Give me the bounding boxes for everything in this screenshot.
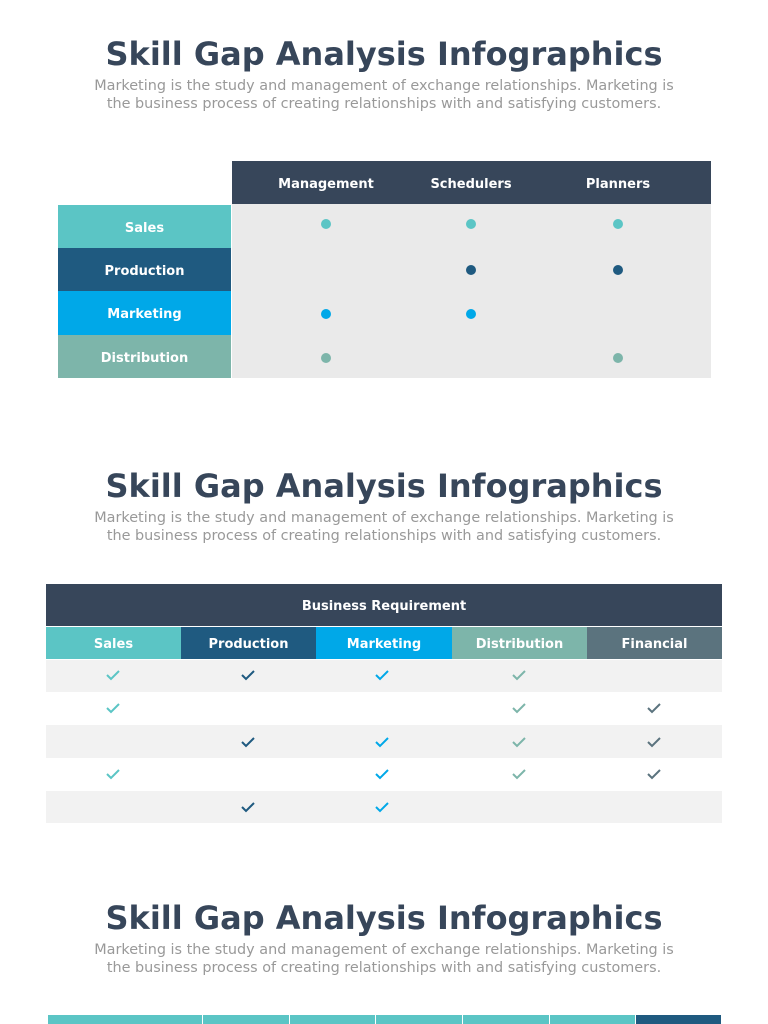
table 1: Marketing (107, 307, 182, 322)
checks (106, 670, 120, 680)
title 2: Skill Gap Analysis Infographics (106, 467, 662, 505)
table 3 header strip (48, 1015, 721, 1024)
table 2: Production (208, 637, 288, 652)
dots (321, 219, 331, 229)
table 1: Schedulers (430, 176, 512, 192)
table 1: Production (104, 264, 184, 278)
table 2: Financial (621, 637, 688, 652)
header (46, 584, 722, 626)
table 1: Planners (586, 176, 650, 192)
table 2: Distribution (476, 637, 563, 652)
header: Business Requirement (302, 599, 466, 614)
subtitle 3: Marketing is the study and management of exchange relationships. Marketing is (94, 942, 674, 958)
row labels: Sales (125, 220, 164, 236)
subtitle 3 (94, 942, 674, 976)
column headers: Sales (94, 637, 133, 652)
header row (232, 161, 711, 204)
table 1 (58, 161, 711, 378)
table 2: Marketing (347, 637, 421, 652)
table 1: Distribution (101, 350, 188, 366)
subtitle 1 (94, 78, 674, 112)
column headers (46, 627, 181, 659)
subtitle 3: the business process of creating relationships with and satisfying customers. (107, 960, 661, 976)
subtitle 1: Marketing is the study and management of exchange relationships. Marketing is (94, 78, 674, 94)
subtitle 2: Marketing is the study and management of exchange relationships. Marketing is (94, 510, 674, 526)
subtitle 2: the business process of creating relationships with and satisfying customers. (107, 528, 661, 544)
title 1: Skill Gap Analysis Infographics (106, 35, 662, 73)
subtitle 2 (94, 510, 674, 544)
title 3: Skill Gap Analysis Infographics (106, 899, 662, 937)
table 1: Management (278, 176, 374, 192)
row labels (58, 205, 231, 248)
table 2 (46, 584, 722, 823)
subtitle 1: the business process of creating relationships with and satisfying customers. (107, 96, 661, 112)
